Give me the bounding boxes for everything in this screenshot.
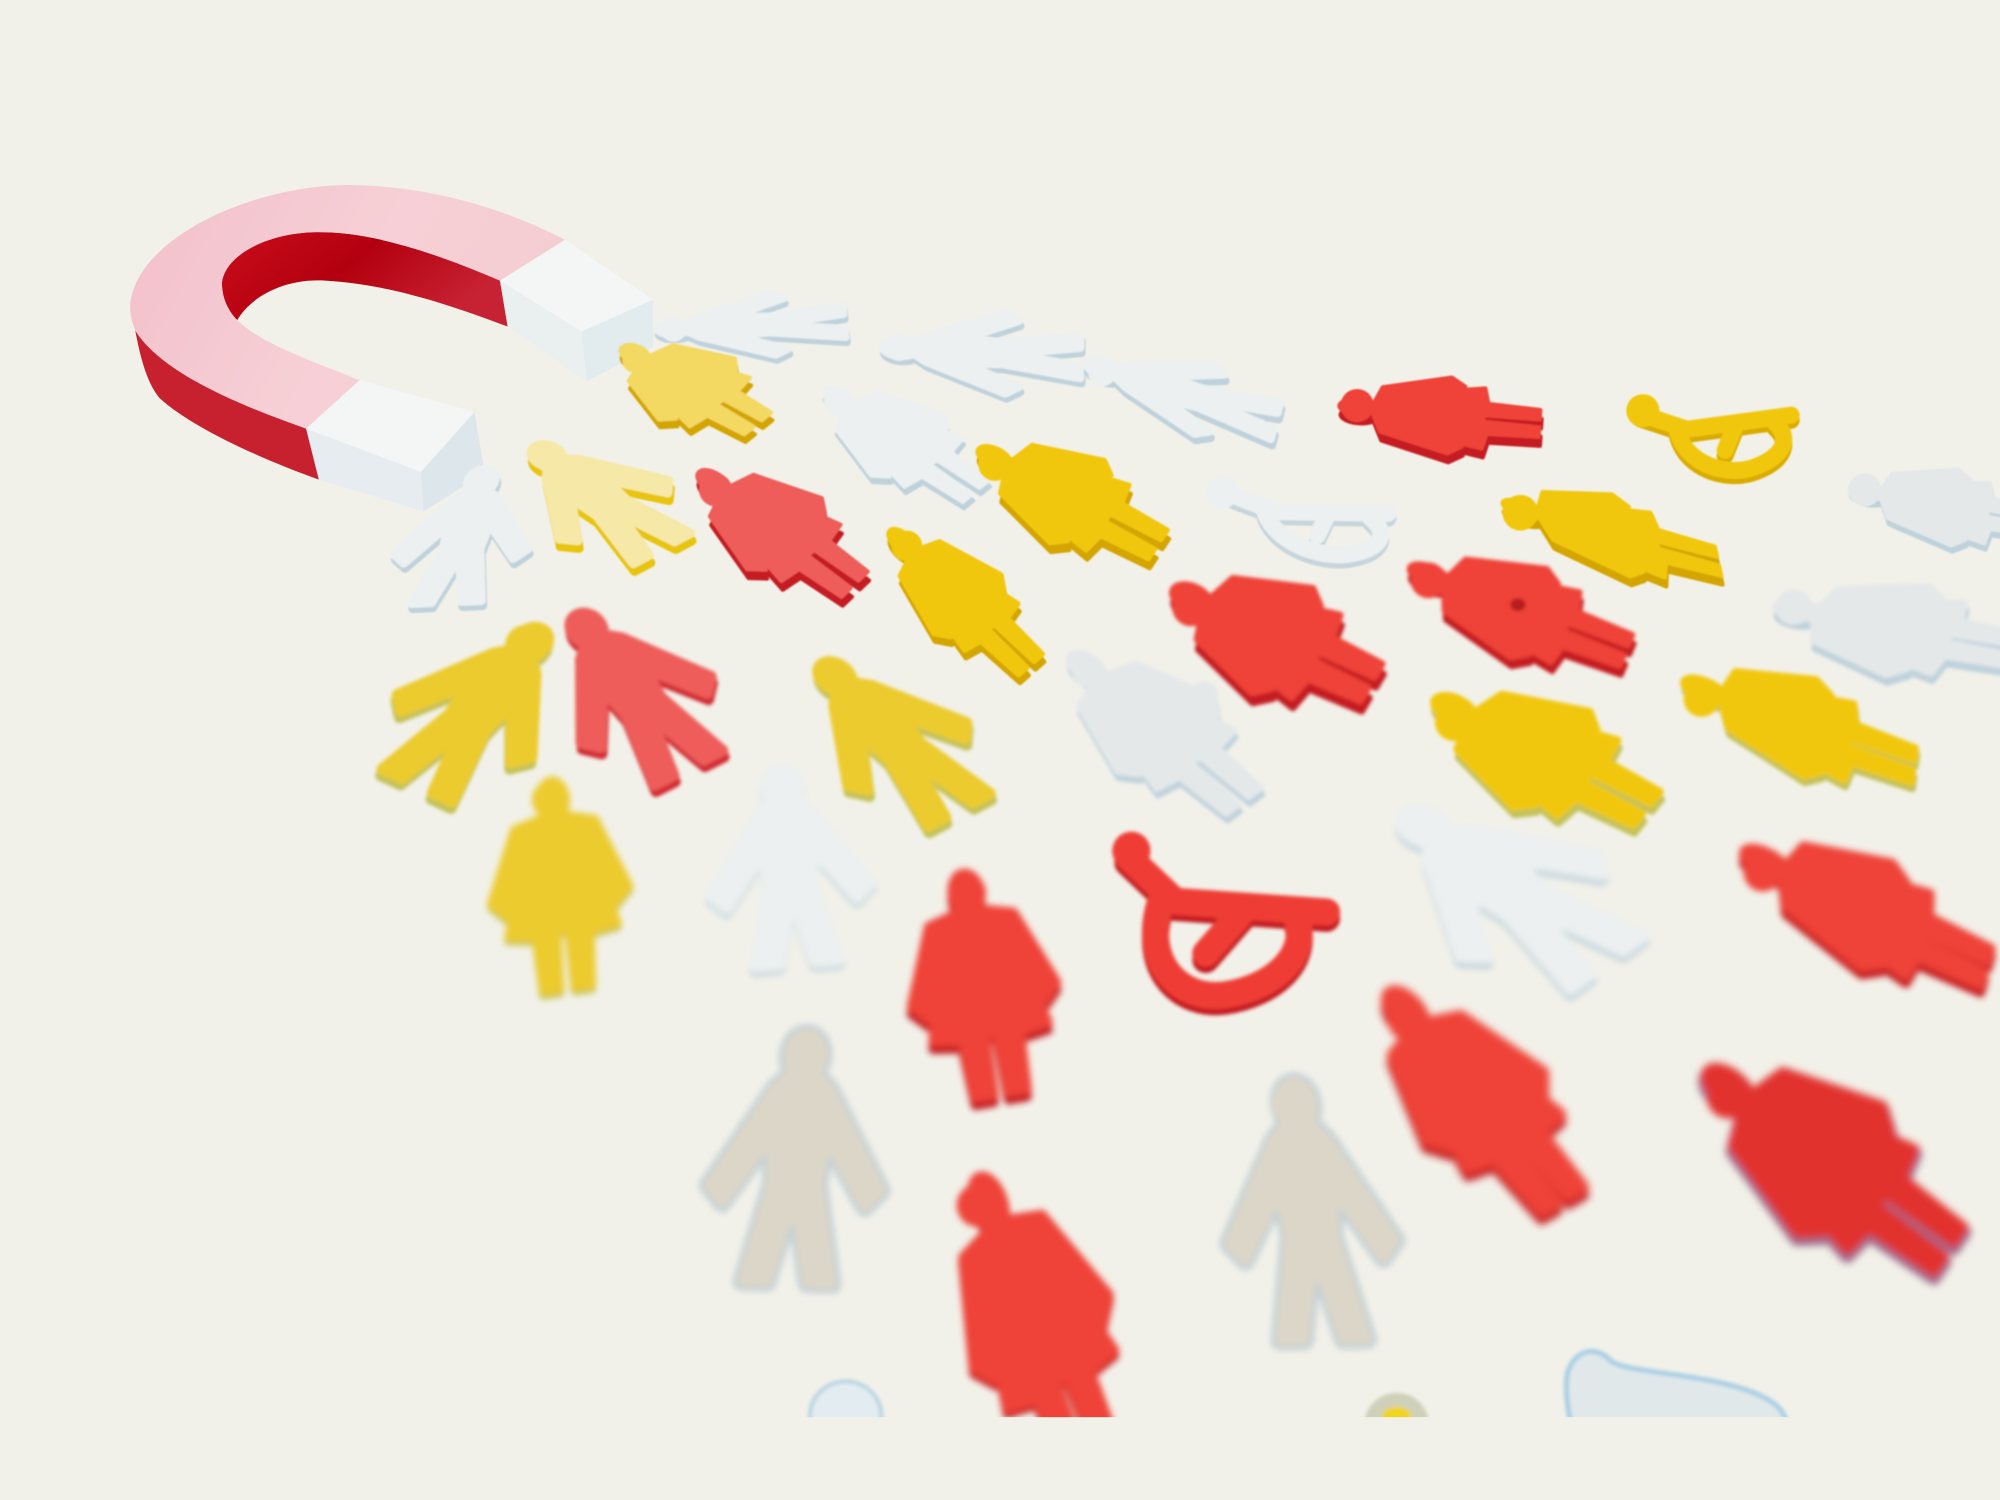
person: yellow woman, lower left (482, 771, 637, 1002)
person: red woman, lower right (1332, 959, 1621, 1240)
magnet: outer red side (135, 330, 319, 480)
person: red woman, row 2 (662, 436, 893, 629)
wheelchair icon: yellow (1626, 386, 1806, 491)
magnet: inner red wall (222, 232, 508, 327)
person: white man, lower centre (701, 762, 877, 974)
magnet: lower white pole (306, 380, 485, 511)
magnet: upper white pole (500, 240, 653, 381)
head: yellow, bottom edge (1364, 1391, 1430, 1418)
person: white woman, right edge (1846, 451, 2000, 567)
person: pale yellow (481, 417, 718, 585)
person: white, lying at bottom edge (1562, 1347, 1790, 1418)
person: white, row 1 (654, 291, 848, 365)
person: white man, right (1335, 761, 1677, 1019)
person: white adult with child (1022, 618, 1294, 844)
person: red woman, lower centre (891, 861, 1074, 1113)
person: red woman, bottom right (1664, 1007, 1992, 1319)
person: red woman, far right (1728, 800, 2000, 1027)
person: white below magnet (380, 467, 553, 610)
person: white woman (789, 358, 1014, 528)
person: yellow woman, row 4 right (1678, 634, 1921, 820)
person: white, row 1 (1078, 329, 1286, 462)
person: beige man, left (700, 1030, 894, 1286)
person: white woman, row 3 far right (1754, 561, 2000, 703)
person: yellow, centre (763, 632, 1020, 848)
wheelchair icon: white (1205, 476, 1406, 563)
horseshoe magnet (130, 185, 653, 511)
person: yellow woman, centre (857, 501, 1066, 702)
person: red woman, row 1 (1337, 368, 1543, 470)
person: yellow, left (348, 597, 609, 824)
person: red, bottom (952, 1166, 1124, 1418)
person: red woman, centre (1143, 537, 1403, 745)
person: yellow woman, row 2 (951, 407, 1187, 595)
person: beige man, right (1209, 1080, 1408, 1342)
person: yellow woman, row 4 (1396, 651, 1687, 864)
person: yellow next to magnet (584, 316, 797, 462)
person: white, row 1 (883, 307, 1082, 403)
crowd of people icons (348, 291, 2000, 1500)
head: white, bottom edge (806, 1378, 885, 1418)
person: yellow woman, row 2 right (1493, 463, 1729, 611)
illustration: magnet attracting a crowd of people icons (130, 185, 2000, 1418)
person: red, left (511, 582, 755, 807)
magnet: pink top face (130, 185, 565, 429)
clipped figures at bottom edge (806, 1166, 1790, 1418)
person: red woman, row 3 right (1391, 523, 1646, 704)
wheelchair icon: red (1094, 832, 1341, 1003)
